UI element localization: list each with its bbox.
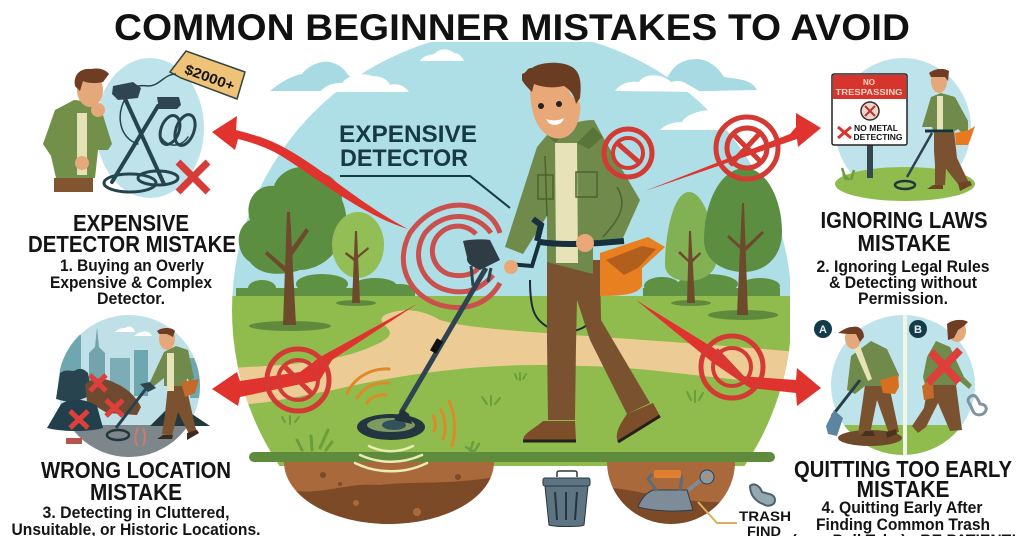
pull tab <box>968 396 986 415</box>
illustration: keep digging vs walking away <box>814 312 986 462</box>
description: Expensive & Complex <box>50 274 213 292</box>
heading: MISTAKE <box>858 230 950 256</box>
callout: expensive detector <box>339 121 510 208</box>
panel: ignoring laws mistake <box>816 58 990 308</box>
left big tree <box>239 167 346 331</box>
price tag <box>130 51 245 99</box>
soil right <box>607 462 735 526</box>
panel: quitting too early mistake <box>792 312 1016 536</box>
heading: EXPENSIVE <box>73 210 189 236</box>
detector <box>116 386 148 428</box>
callout: expensive detector: DETECTOR <box>340 145 468 172</box>
handle <box>533 219 624 244</box>
right big tree <box>704 168 782 320</box>
head <box>530 81 581 138</box>
heading <box>794 456 1012 502</box>
small left tree <box>332 212 384 306</box>
red crosses <box>70 375 123 428</box>
sign: NO METAL <box>854 124 898 133</box>
description: Detector. <box>97 290 165 308</box>
description <box>50 257 213 308</box>
sign: NO <box>863 78 875 87</box>
arrow: to expensive detector mistake <box>212 116 408 229</box>
red signal rings behind detector <box>403 205 500 308</box>
heading: MISTAKE <box>856 476 950 502</box>
arrow: to quitting too early mistake <box>636 300 821 406</box>
badge A <box>814 320 832 338</box>
trash bags <box>56 369 92 403</box>
coil signal waves <box>347 369 455 471</box>
description: & Detecting without <box>829 274 977 292</box>
illustration: no trespassing sign <box>832 58 975 201</box>
arrow: to wrong location mistake <box>212 304 417 411</box>
central park scene <box>230 30 800 527</box>
description <box>816 258 990 308</box>
sign: DETECTING <box>854 133 902 142</box>
arrow: to ignoring laws mistake <box>604 113 821 191</box>
man <box>43 100 112 178</box>
sign <box>832 74 907 145</box>
panel: wrong location mistake <box>12 315 260 536</box>
description: 4. Quitting Early After <box>822 499 983 517</box>
heading: WRONG LOCATION <box>41 457 231 483</box>
heading <box>28 210 236 257</box>
neck <box>553 125 577 149</box>
illustration: cluttered city site <box>47 315 210 460</box>
person <box>505 63 665 442</box>
red x <box>178 162 208 192</box>
white band behind title <box>0 0 1024 42</box>
description: Finding Common Trash <box>816 516 990 534</box>
heading <box>41 457 231 505</box>
man <box>162 385 198 436</box>
description <box>792 499 1016 536</box>
description: 1. Buying an Overly <box>60 257 205 275</box>
detectors <box>104 92 199 192</box>
bag <box>600 256 642 296</box>
clouds <box>270 49 757 130</box>
heading <box>820 207 988 256</box>
callout: expensive detector: EXPENSIVE <box>339 121 477 148</box>
pull tab find <box>750 484 775 506</box>
walking man <box>912 385 962 433</box>
price tag: $2000+ <box>183 61 237 94</box>
man <box>934 130 970 189</box>
grass tufts <box>282 373 703 452</box>
trash find label: TRASH <box>739 508 791 524</box>
description: Permission. <box>858 290 948 308</box>
description: 2. Ignoring Legal Rules <box>816 258 990 276</box>
trash can <box>543 471 590 526</box>
boots <box>523 421 576 441</box>
description: 3. Detecting in Cluttered, <box>42 504 230 522</box>
badge A: A <box>819 324 827 336</box>
old iron find <box>638 470 737 523</box>
horizon bushes <box>236 274 780 298</box>
illustration: man with pricey detectors <box>43 51 245 198</box>
trash find label <box>739 508 791 536</box>
jacket <box>505 120 640 274</box>
path <box>230 310 800 405</box>
badge B: B <box>914 324 922 336</box>
digging man <box>858 385 899 434</box>
heading: DETECTOR MISTAKE <box>28 231 236 257</box>
description <box>12 504 260 536</box>
panel: expensive detector mistake <box>28 51 245 308</box>
right small tree <box>665 192 717 306</box>
ground bar <box>249 452 775 462</box>
cable <box>530 270 600 332</box>
badge B <box>909 320 927 338</box>
sign: TRESPASSING <box>836 88 902 97</box>
shirt <box>555 143 578 263</box>
red x over man <box>928 350 960 383</box>
title: COMMON BEGINNER MISTAKES TO AVOID <box>114 7 910 48</box>
pants <box>547 260 650 420</box>
detector <box>357 234 594 440</box>
soil left <box>284 462 494 527</box>
heading: MISTAKE <box>90 479 182 505</box>
heading: IGNORING LAWS <box>820 207 988 233</box>
